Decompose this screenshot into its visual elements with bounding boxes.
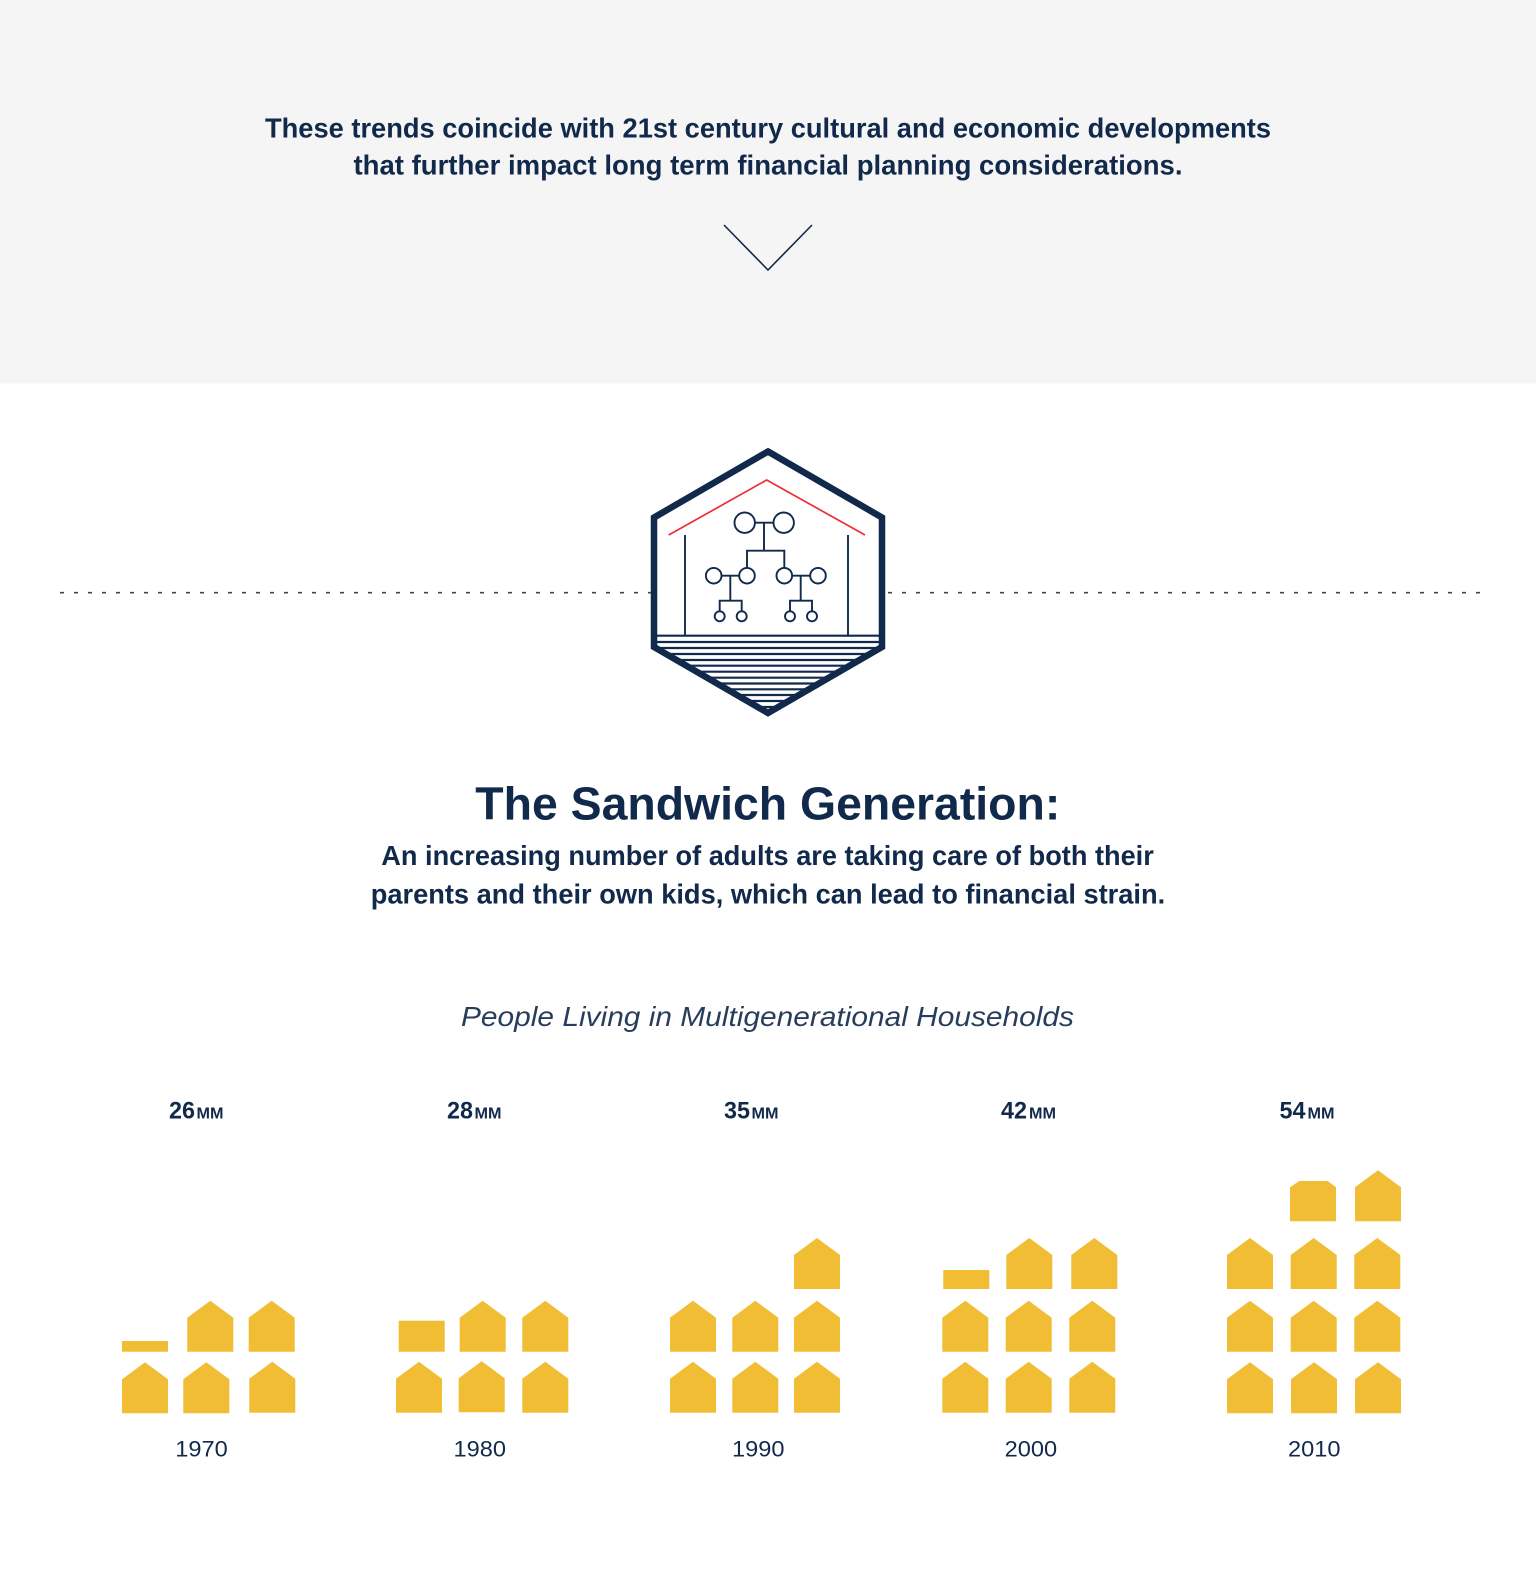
subheading: An increasing number of adults are taking care of both their	[381, 840, 1154, 871]
value 35MM: 35	[724, 1097, 750, 1124]
striped floor	[650, 636, 886, 707]
value 42MM: MM	[1029, 1105, 1056, 1122]
value 42MM: 42	[1001, 1097, 1027, 1124]
value 54MM: 54	[1280, 1097, 1306, 1124]
year 2010: 2010	[1288, 1437, 1340, 1462]
dotted divider right	[888, 592, 1480, 594]
houses 2010	[1227, 1170, 1401, 1413]
value 54MM	[1280, 1097, 1334, 1124]
value 35MM	[724, 1097, 778, 1124]
column: 2010	[1227, 1097, 1401, 1462]
value 26MM	[169, 1097, 224, 1124]
intro text	[265, 112, 1271, 180]
hexagon outline	[654, 452, 882, 713]
intro text: that further impact long term financial planning considerations.	[354, 150, 1182, 180]
subheading: parents and their own kids, which can lead to financial strain.	[371, 878, 1165, 909]
value 28MM: 28	[447, 1097, 473, 1124]
chart title: People Living in Multigenerational Households	[461, 1001, 1074, 1032]
column: 1980	[396, 1097, 568, 1462]
value 26MM: 26	[169, 1097, 195, 1124]
panel: top grey band	[0, 0, 1536, 384]
year 1980: 1980	[454, 1437, 506, 1462]
value 42MM	[1001, 1097, 1056, 1124]
houses 2000	[942, 1238, 1117, 1413]
houses 1970	[122, 1301, 295, 1413]
column: 1970	[122, 1097, 295, 1462]
dotted divider left	[60, 592, 660, 594]
houses 1980	[396, 1301, 568, 1413]
red roof line	[669, 480, 865, 535]
intro text: These trends coincide with 21st century cultural and economic developments	[265, 112, 1271, 143]
heading: The Sandwich Generation:	[475, 778, 1060, 830]
column: 2000	[942, 1097, 1117, 1462]
value 54MM: MM	[1308, 1105, 1334, 1122]
house walls	[685, 535, 848, 636]
subheading	[371, 840, 1165, 909]
icon: hexagon house with family tree	[650, 452, 886, 713]
houses 1990	[670, 1238, 840, 1413]
value 26MM: MM	[196, 1105, 224, 1122]
value 35MM: MM	[752, 1105, 778, 1122]
value 28MM: MM	[474, 1105, 502, 1122]
year 2000: 2000	[1005, 1437, 1057, 1462]
chart: multigenerational households pictogram	[122, 1097, 1401, 1462]
year 1990: 1990	[732, 1437, 784, 1462]
family tree	[706, 512, 826, 621]
year 1970: 1970	[175, 1437, 228, 1462]
value 28MM	[447, 1097, 502, 1124]
column: 1990	[670, 1097, 840, 1462]
arrow: chevron down	[724, 225, 812, 270]
